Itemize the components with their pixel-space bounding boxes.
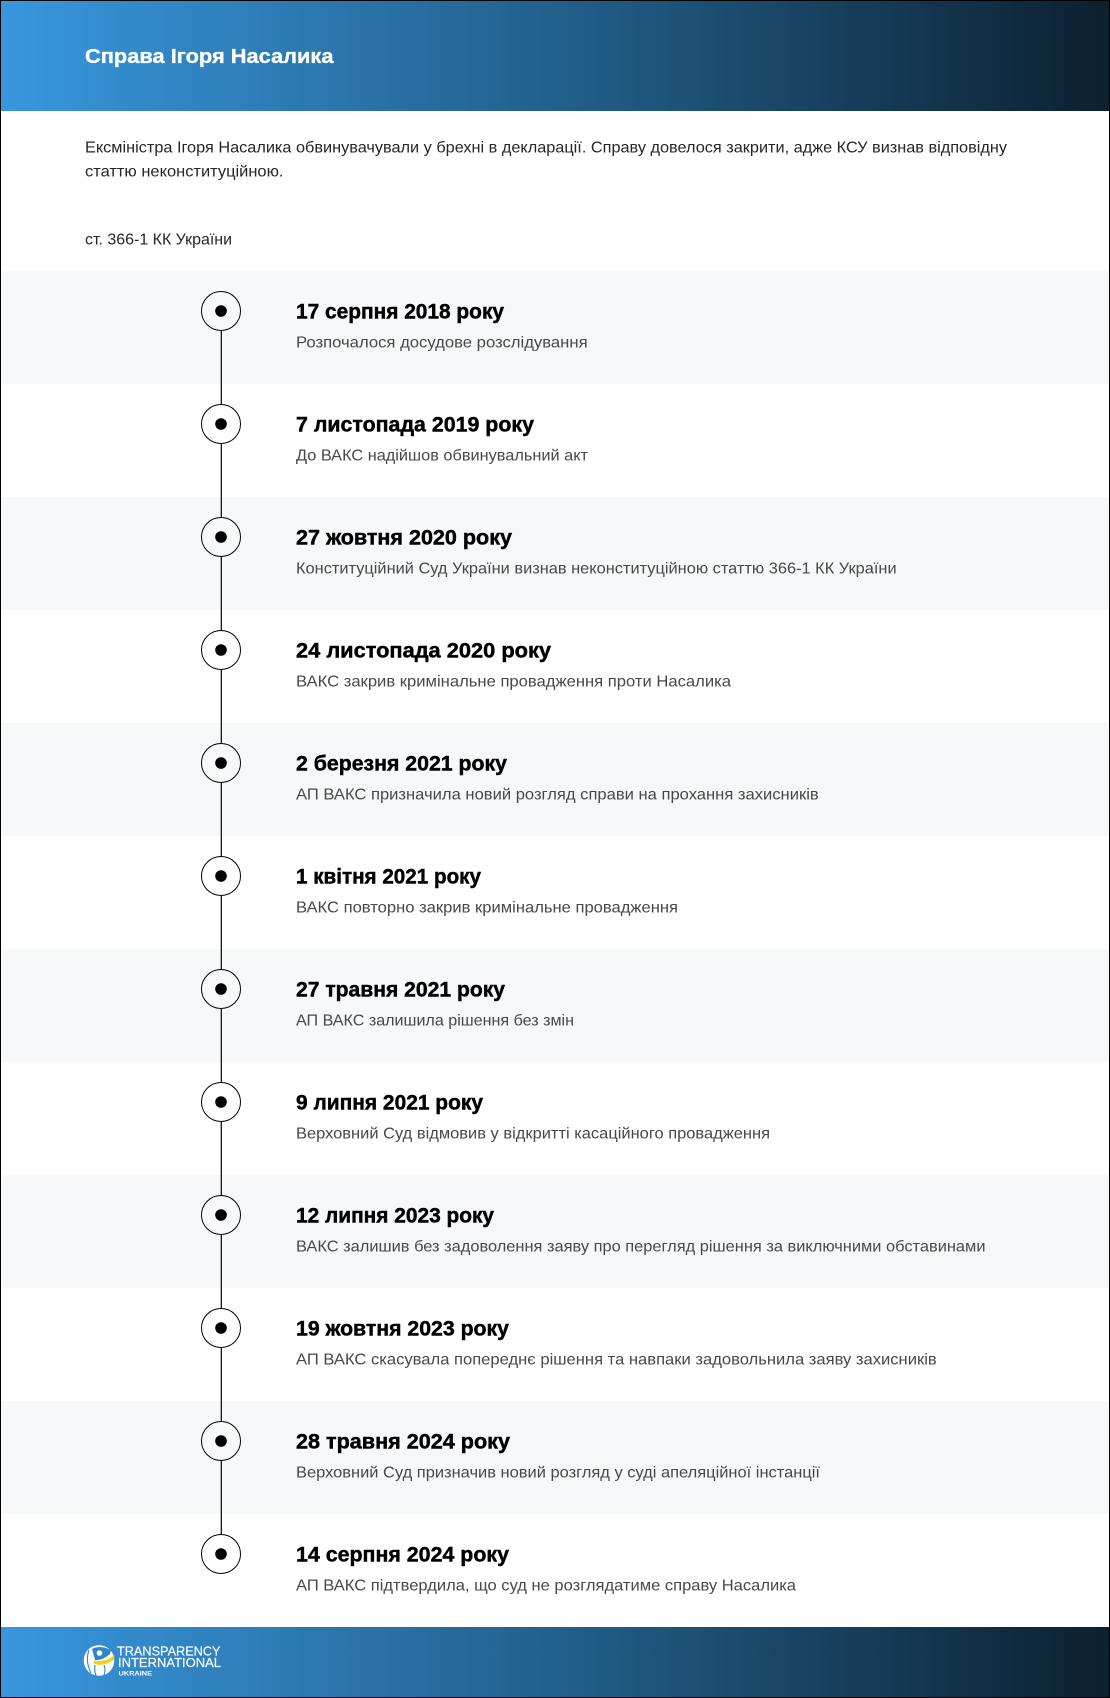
- logo: Transparency International Ukraine: TRANSPARENCY: [117, 1645, 221, 1659]
- event: 9 липня 2021: [202, 1082, 770, 1142]
- event: 7 листопада 2019: До ВАКС надійшов обвинувальний акт: [296, 447, 589, 464]
- event: 1 квітня 2021: ВАКС повторно закрив кримінальне провадження: [296, 899, 678, 916]
- event: 24 листопада 2020: 24 листопада 2020 року: [296, 640, 551, 662]
- header band: [0, 0, 1110, 111]
- icon: globe with figure: [84, 1645, 114, 1676]
- event: 19 жовтня 2023: [202, 1308, 937, 1368]
- event: 27 травня 2021: АП ВАКС залишила рішення без змін: [296, 1012, 574, 1029]
- event: 27 жовтня 2020: 27 жовтня 2020 року: [296, 526, 512, 550]
- event: 12 липня 2023: ВАКС залишив без задоволення заяву про перегляд рішення за виключними обставинами: [296, 1238, 986, 1255]
- timeline line: [220, 311, 222, 1554]
- event: 27 травня 2021: [202, 970, 574, 1029]
- event: 14 серпня 2024: АП ВАКС підтвердила, що суд не розглядатиме справу Насалика: [296, 1577, 796, 1594]
- event: 28 травня 2024: Верховний Суд призначив новий розгляд у суді апеляційної інстанції: [296, 1464, 821, 1481]
- event: 28 травня 2024: 28 травня 2024 року: [296, 1430, 510, 1454]
- event: 7 листопада 2019: 7 листопада 2019 року: [296, 414, 534, 436]
- event: 19 жовтня 2023: 19 жовтня 2023 року: [296, 1318, 509, 1340]
- intro text: Ексміністра Ігоря Насалика обвинувачували у брехні в декларації. Справу довелося закрити, адже КСУ визнав відповідну: [85, 140, 1007, 157]
- event: 12 липня 2023: [202, 1196, 986, 1255]
- intro text: статтю неконституційною.: [85, 164, 284, 181]
- event: 24 листопада 2020: [202, 630, 731, 690]
- event: 17 серпня 2018: 17 серпня 2018 року: [296, 300, 504, 324]
- logo: Transparency International Ukraine: UKRAINE: [118, 1670, 152, 1678]
- event: 17 серпня 2018: [202, 292, 588, 351]
- event: 19 жовтня 2023: АП ВАКС скасувала попереднє рішення та навпаки задовольнила заяву захисників: [296, 1351, 937, 1368]
- title: Справа Ігоря Насалика: [85, 46, 334, 68]
- event: 28 травня 2024: [202, 1422, 821, 1481]
- event: 17 серпня 2018: Розпочалося досудове розслідування: [296, 334, 588, 351]
- logo: Transparency International Ukraine: [84, 1645, 221, 1678]
- event: 1 квітня 2021: 1 квітня 2021 року: [296, 866, 481, 888]
- intro text: [85, 140, 1007, 181]
- event: 27 жовтня 2020: Конституційний Суд України визнав неконституційною статтю 366-1 КК України: [296, 560, 897, 577]
- event: 2 березня 2021: 2 березня 2021 року: [296, 752, 507, 776]
- event: 24 листопада 2020: ВАКС закрив кримінальне провадження проти Насалика: [296, 673, 731, 690]
- event: 27 жовтня 2020: [202, 518, 897, 577]
- logo: Transparency International Ukraine: INTERNATIONAL: [118, 1656, 221, 1670]
- event: 12 липня 2023: 12 липня 2023 року: [296, 1204, 494, 1228]
- article reference: ст. 366-1 КК України: [85, 232, 232, 248]
- event: 2 березня 2021: [202, 744, 819, 803]
- event: 7 листопада 2019: [202, 404, 589, 464]
- event: 9 липня 2021: 9 липня 2021 року: [296, 1092, 483, 1114]
- event: 1 квітня 2021: [202, 856, 678, 916]
- event: 9 липня 2021: Верховний Суд відмовив у відкритті касаційного провадження: [296, 1125, 770, 1142]
- footer band: [0, 1627, 1110, 1698]
- event: 27 травня 2021: 27 травня 2021 року: [296, 978, 505, 1002]
- event: 14 серпня 2024: [202, 1534, 796, 1594]
- event: 2 березня 2021: АП ВАКС призначила новий розгляд справи на прохання захисників: [296, 786, 819, 803]
- row backgrounds: [0, 271, 1110, 1514]
- event: 14 серпня 2024: 14 серпня 2024 року: [296, 1544, 509, 1566]
